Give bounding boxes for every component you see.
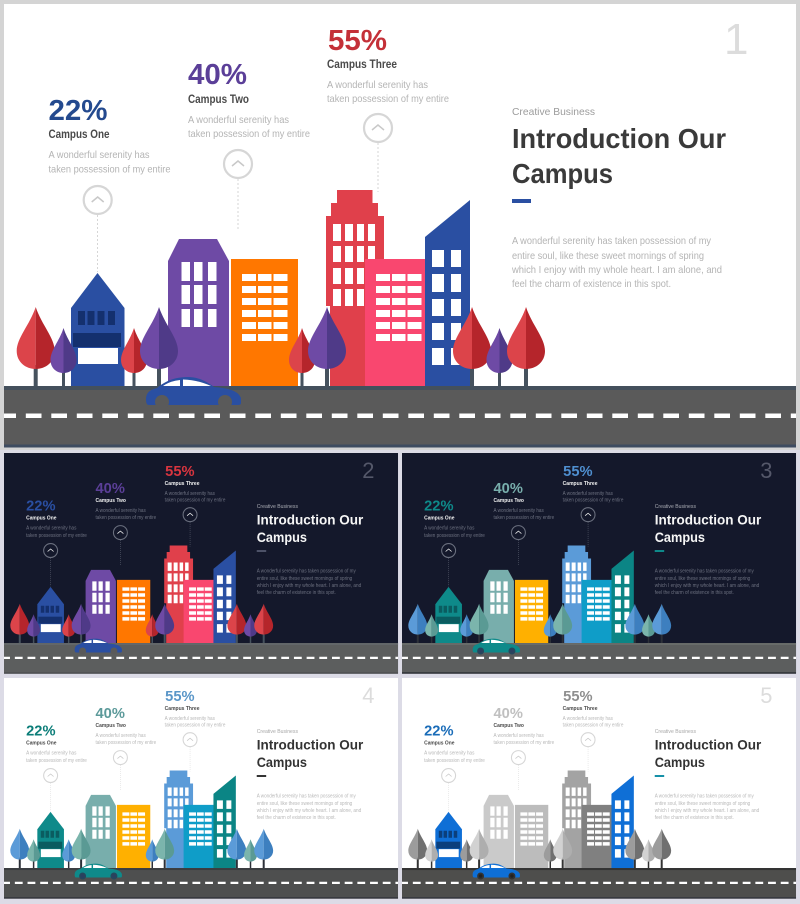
callout: campus three: 55% (563, 464, 593, 480)
callout: campus one (424, 724, 485, 811)
text block: heading and body: feel the charm of existence in this spot. (655, 815, 734, 821)
callout: campus two: 40% (494, 706, 523, 722)
callout: campus three (563, 464, 624, 547)
text block: heading and body: A wonderful serenity has taken possession of my (257, 568, 356, 574)
callout: campus two: 40% (96, 481, 125, 497)
illustration: city buildings and trees (408, 771, 671, 868)
text block: heading and body: Introduction Our (655, 737, 762, 753)
callout: campus three: A wonderful serenity has (165, 491, 215, 497)
text block: heading and body: feel the charm of existence in this spot. (257, 590, 336, 596)
callout: campus one: Campus One (48, 129, 110, 141)
callout: campus one: 22% (26, 499, 56, 515)
text block: heading and body: A wonderful serenity has taken possession of my (655, 793, 754, 799)
icon: car (473, 864, 520, 879)
road (4, 386, 796, 448)
text block: heading and body: Campus (655, 754, 705, 770)
text block: heading and body: Campus (257, 529, 307, 545)
callout: campus one: 22% (424, 724, 454, 740)
illustration: city buildings and trees (10, 771, 273, 868)
callout: campus two: A wonderful serenity has (494, 733, 544, 739)
slide number: 5 (760, 683, 772, 708)
callout: campus three: Campus Three (165, 481, 200, 487)
text block: heading and body: Creative Business (512, 106, 595, 118)
text block: heading and body: Creative Business (257, 729, 298, 735)
text block: heading and body (257, 504, 364, 596)
callout: campus two: taken possession of my entire (96, 740, 156, 746)
text block: heading and body: entire soul, like these sweet mornings of spring (257, 576, 352, 582)
slide number: 1 (724, 15, 748, 64)
callout: campus one: taken possession of my entire (424, 758, 485, 764)
callout: campus three: taken possession of my entire (563, 498, 624, 504)
callout: campus two: A wonderful serenity has (494, 508, 544, 514)
text block: heading and body: Campus (512, 158, 613, 189)
callout: campus one: A wonderful serenity has (26, 751, 77, 757)
text block: heading and body: which I enjoy with my whole heart. I am alone, and (655, 808, 759, 814)
callout: campus one: Campus One (424, 741, 454, 747)
callout: campus one: 22% (424, 499, 454, 515)
callout: campus two: A wonderful serenity has (188, 115, 289, 126)
road (4, 868, 398, 899)
icon: car (473, 639, 520, 654)
callout: campus two: Campus Two (494, 723, 524, 729)
callout: campus three: 55% (328, 25, 387, 57)
text block: heading and body: which I enjoy with my whole heart. I am alone, and (257, 808, 361, 814)
callout: campus one: taken possession of my entire (48, 164, 171, 176)
callout: campus three: taken possession of my entire (563, 723, 624, 729)
icon: car (75, 864, 122, 879)
callout: campus three: taken possession of my entire (165, 723, 226, 729)
callout: campus two: Campus Two (494, 498, 524, 504)
panel: slide 4 light teal theme (4, 678, 398, 899)
text block: heading and body (655, 504, 762, 596)
text block: heading and body: A wonderful serenity has taken possession of my (257, 793, 356, 799)
callout: campus three: Campus Three (563, 706, 598, 712)
text block: heading and body: feel the charm of existence in this spot. (655, 590, 734, 596)
callout: campus three: Campus Three (165, 706, 200, 712)
text block: heading and body (655, 729, 762, 821)
callout: campus one: taken possession of my entire (26, 758, 87, 764)
callout: campus three: taken possession of my entire (327, 94, 449, 105)
illustration: city buildings and trees (10, 546, 273, 643)
callout: campus two: A wonderful serenity has (96, 508, 146, 514)
callout: campus one: 22% (48, 95, 108, 127)
callout: campus one: Campus One (26, 516, 56, 522)
illustration: city buildings and trees (17, 190, 545, 386)
callout: campus two: 40% (188, 59, 247, 91)
text block: heading and body: which I enjoy with my whole heart. I am alone, and (655, 583, 759, 589)
panel: slide 1 (4, 4, 796, 448)
callout: campus three: Campus Three (327, 59, 397, 71)
callout: campus three: 55% (563, 689, 593, 705)
text block: heading and body: entire soul, like these sweet mornings of spring (655, 801, 750, 807)
callout: campus two (96, 481, 156, 566)
text block: heading and body: which I enjoy with my whole heart. I am alone, and (257, 583, 361, 589)
callout: campus three: taken possession of my entire (165, 498, 226, 504)
callout: campus two (188, 59, 310, 231)
callout: campus one: Campus One (26, 741, 56, 747)
callout: campus two: A wonderful serenity has (96, 733, 146, 739)
icon: car (146, 377, 241, 409)
text block: heading and body: Introduction Our (655, 512, 762, 528)
text block: heading and body: Introduction Our (512, 123, 726, 154)
callout: campus three: Campus Three (563, 481, 598, 487)
text block: heading and body: Creative Business (257, 504, 298, 510)
callout: campus two: Campus Two (96, 723, 126, 729)
callout: campus one (424, 499, 485, 586)
callout: campus three (327, 25, 449, 192)
text block: heading and body: entire soul, like these sweet mornings of spring (655, 576, 750, 582)
text block: heading and body: entire soul, like these sweet mornings of spring (512, 251, 704, 262)
callout: campus two: taken possession of my entire (494, 515, 554, 521)
text block: heading and body: Creative Business (655, 504, 696, 510)
callout: campus one: taken possession of my entire (424, 533, 485, 539)
callout: campus two: Campus Two (96, 498, 126, 504)
callout: campus three: A wonderful serenity has (563, 716, 613, 722)
callout: campus two (494, 706, 554, 791)
callout: campus one (26, 724, 87, 811)
callout: campus two (494, 481, 554, 566)
callout: campus one: A wonderful serenity has (48, 150, 150, 161)
slide number: 2 (362, 458, 374, 483)
illustration: city buildings and trees (408, 546, 671, 643)
text block: heading and body (511, 106, 726, 290)
callout: campus one: 22% (26, 724, 56, 740)
callout: campus two: 40% (96, 706, 125, 722)
text block: heading and body: A wonderful serenity has taken possession of my (655, 568, 754, 574)
callout: campus three: A wonderful serenity has (563, 491, 613, 497)
callout: campus three (165, 689, 226, 772)
callout: campus two: 40% (494, 481, 523, 497)
callout: campus one (48, 95, 171, 272)
callout: campus two (96, 706, 156, 791)
text block: heading and body: Campus (257, 754, 307, 770)
callout: campus two: taken possession of my entire (494, 740, 554, 746)
text block: heading and body: Introduction Our (257, 737, 364, 753)
text block: heading and body: Campus (655, 529, 705, 545)
callout: campus one: taken possession of my entire (26, 533, 87, 539)
text block: heading and body: feel the charm of existence in this spot. (257, 815, 336, 821)
panel: slide 2 dark red-purple theme (4, 453, 398, 674)
callout: campus one: A wonderful serenity has (26, 526, 77, 532)
panel: slide 3 dark teal theme (402, 453, 796, 674)
text block: heading and body: Creative Business (655, 729, 696, 735)
callout: campus three: A wonderful serenity has (165, 716, 215, 722)
callout: campus three (563, 689, 624, 772)
slide number: 4 (362, 683, 374, 708)
text block: heading and body: which I enjoy with my whole heart. I am alone, and (511, 265, 722, 276)
frame strip (0, 0, 800, 450)
callout: campus one: Campus One (424, 516, 454, 522)
callout: campus three: 55% (165, 689, 195, 705)
callout: campus one: A wonderful serenity has (424, 526, 475, 532)
callout: campus one: A wonderful serenity has (424, 751, 475, 757)
callout: campus two: Campus Two (188, 94, 249, 106)
callout: campus three: 55% (165, 464, 195, 480)
road (402, 643, 796, 674)
text block: heading and body: feel the charm of existence in this spot. (512, 279, 671, 290)
text block: heading and body: entire soul, like these sweet mornings of spring (257, 801, 352, 807)
text block: heading and body: Introduction Our (257, 512, 364, 528)
slide number: 3 (760, 458, 772, 483)
callout: campus two: taken possession of my entire (96, 515, 156, 521)
callout: campus two: taken possession of my entire (188, 129, 310, 140)
road (4, 643, 398, 674)
callout: campus one (26, 499, 87, 586)
callout: campus three (165, 464, 226, 547)
text block: heading and body: A wonderful serenity has taken possession of my (512, 236, 712, 247)
panel: slide 5 greyscale and blue theme (402, 678, 796, 899)
text block: heading and body (257, 729, 364, 821)
callout: campus three: A wonderful serenity has (327, 80, 428, 91)
road (402, 868, 796, 899)
icon: car (75, 639, 122, 654)
